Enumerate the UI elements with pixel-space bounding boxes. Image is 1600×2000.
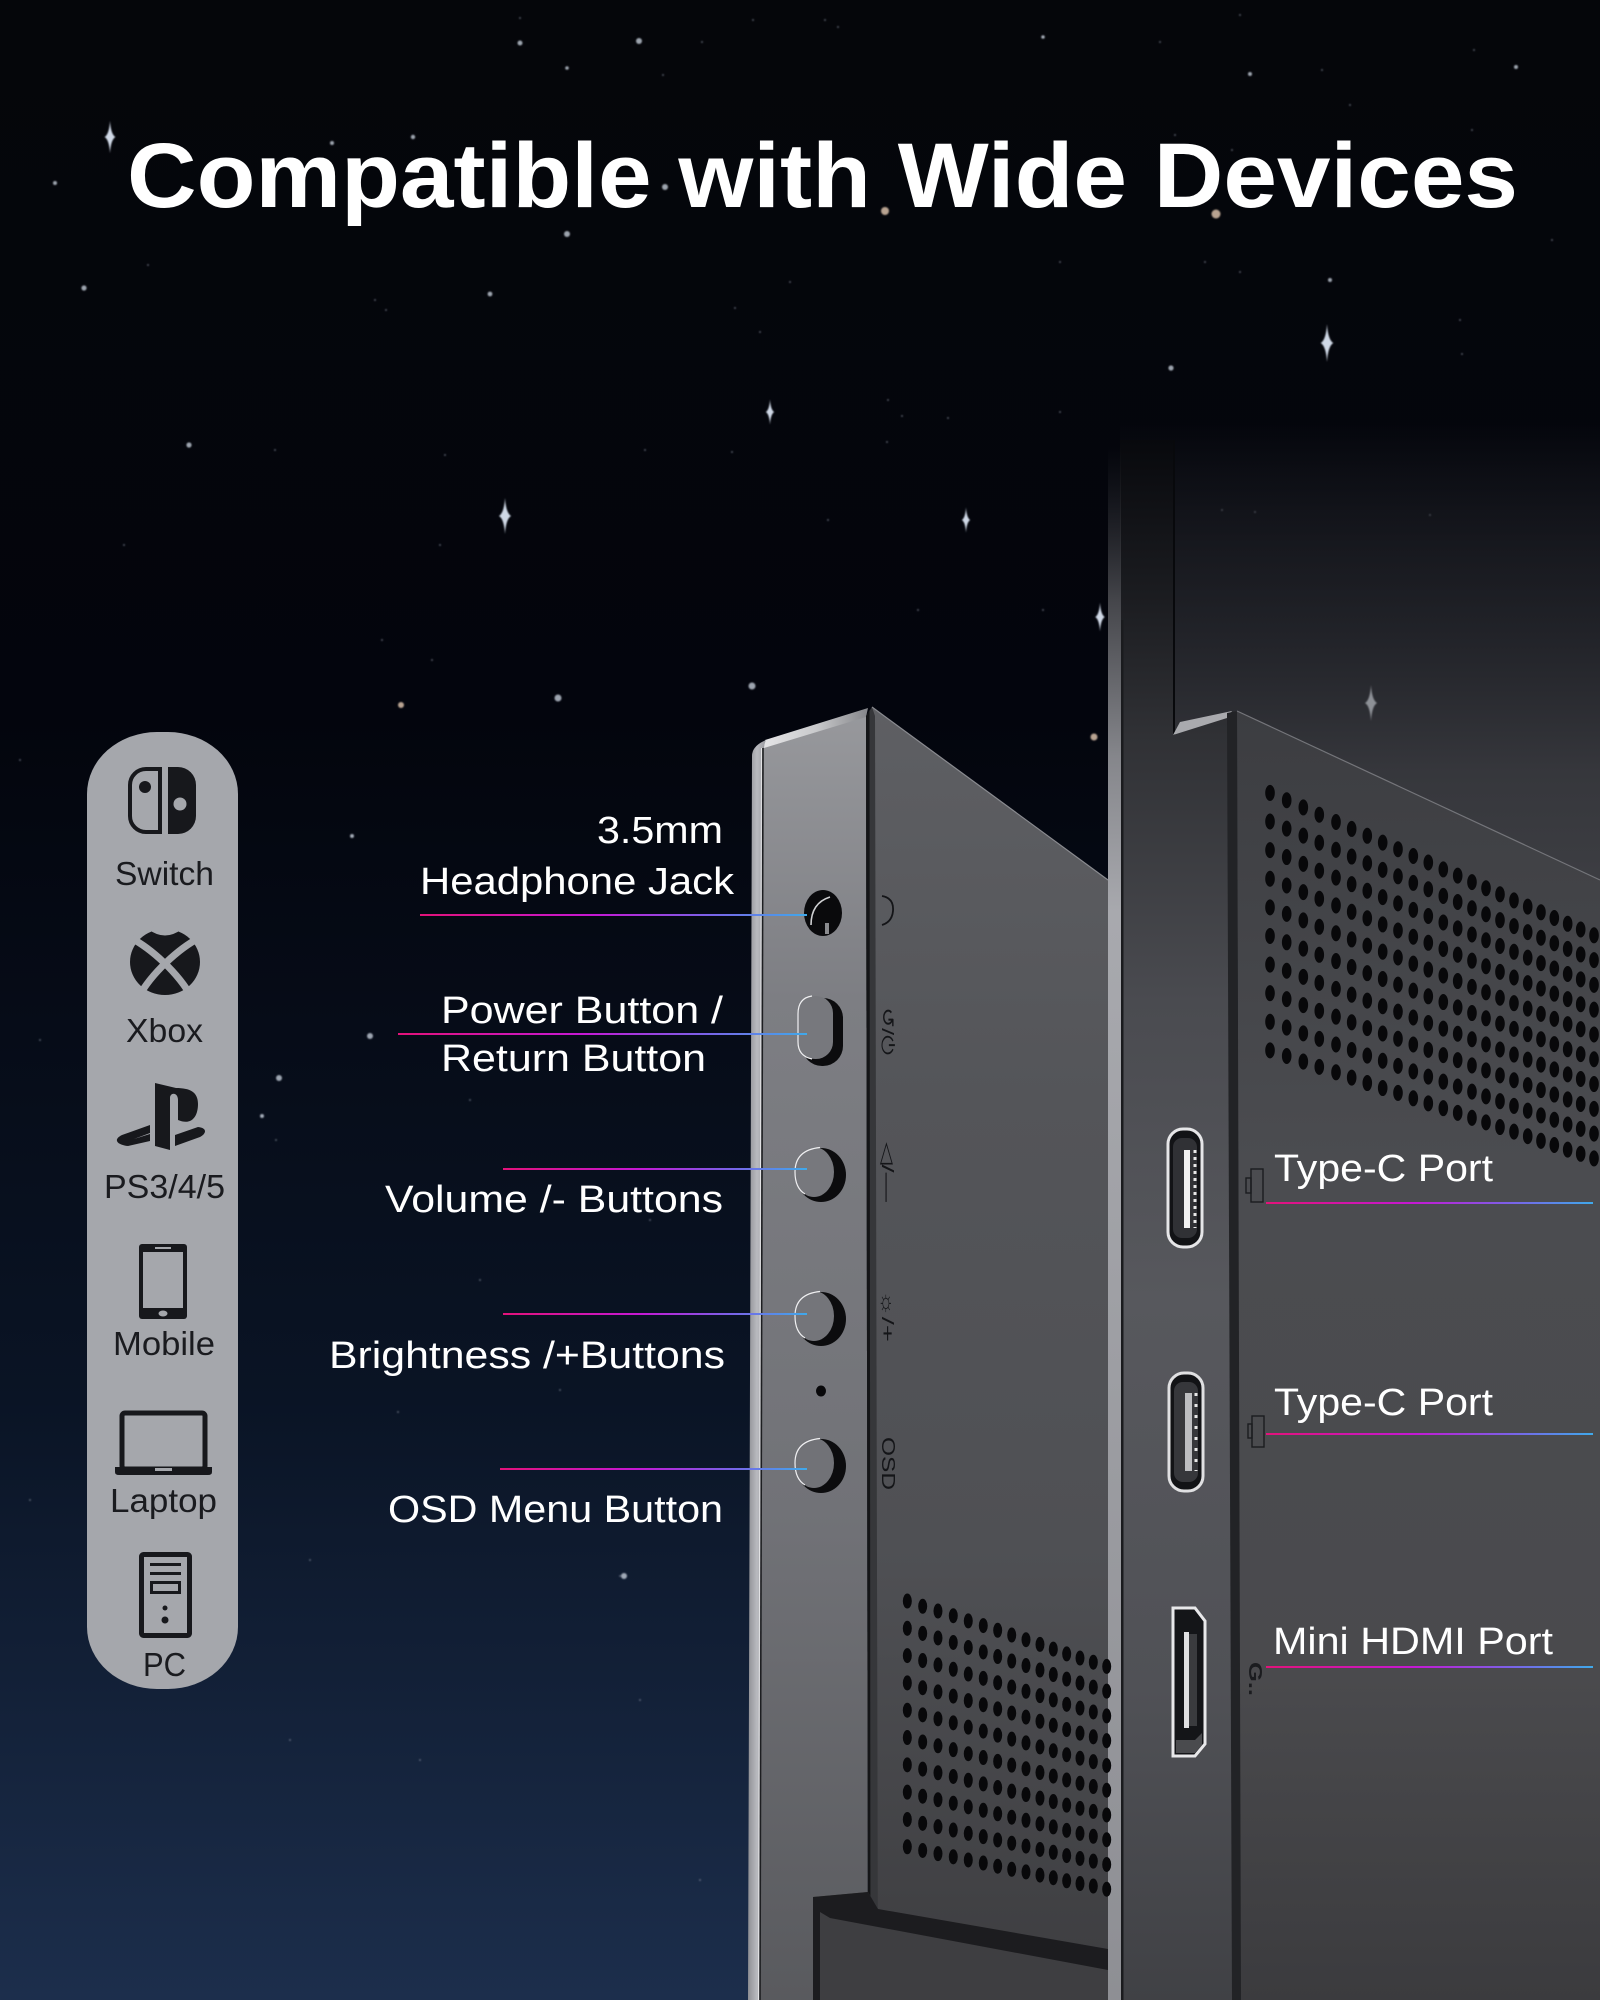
brightness button bbox=[794, 1291, 846, 1346]
callout: headphone jack: 3.5mm bbox=[597, 810, 723, 852]
callout: power / return button: Return Button bbox=[441, 1038, 706, 1080]
icon: Xbox bbox=[130, 926, 200, 998]
left monitor top bevel bbox=[764, 708, 868, 748]
icon: desktop PC bbox=[142, 1554, 190, 1636]
left monitor metal edge strip bbox=[748, 740, 766, 2000]
left monitor body bbox=[748, 707, 1108, 2000]
label: Switch: Switch bbox=[115, 855, 214, 892]
title: Compatible with Wide Devices bbox=[127, 125, 1518, 227]
label: PS3/4/5: PS3/4/5 bbox=[104, 1168, 225, 1205]
label: Xbox: Xbox bbox=[126, 1012, 204, 1049]
right monitor metal edge strip bbox=[1108, 446, 1121, 2000]
headphone jack bbox=[804, 890, 842, 936]
left vent holes bbox=[907, 1601, 1107, 1890]
right monitor corner bevel bbox=[1173, 711, 1232, 735]
right monitor back panel bbox=[1237, 711, 1600, 2000]
port mark: Type-C lower bbox=[1248, 1416, 1264, 1447]
callout: volume buttons: Volume /- Buttons bbox=[385, 1179, 723, 1221]
callout: OSD menu button: OSD Menu Button bbox=[388, 1489, 723, 1531]
callout: power / return button bbox=[398, 990, 807, 1080]
right monitor body bbox=[1108, 440, 1600, 2000]
silk mark: power / return: ↺/⏻ bbox=[878, 1007, 897, 1056]
port mark: HDMI: G.. bbox=[1245, 1662, 1265, 1696]
port: Mini HDMI bbox=[1173, 1608, 1205, 1756]
icon: PlayStation bbox=[117, 1083, 205, 1150]
callout: Type-C port lower: Type-C Port bbox=[1274, 1382, 1493, 1424]
device compatibility pill bbox=[87, 732, 238, 1689]
volume button bbox=[794, 1147, 846, 1202]
left monitor stand recess bbox=[813, 1892, 1108, 2000]
icon: Nintendo Switch bbox=[130, 767, 196, 834]
left monitor back panel bbox=[870, 707, 1108, 2000]
icon: laptop bbox=[115, 1413, 212, 1475]
port mark: Type-C upper bbox=[1246, 1169, 1263, 1202]
silk mark: OSD: OSD bbox=[878, 1437, 898, 1490]
callout: headphone jack bbox=[420, 810, 807, 916]
callout: brightness buttons: Brightness /+Buttons bbox=[329, 1335, 725, 1377]
callout: headphone jack: Headphone Jack bbox=[420, 861, 735, 903]
callout: power / return button: Power Button / bbox=[441, 990, 723, 1032]
silk mark: headphone bbox=[882, 896, 893, 925]
right vent holes bbox=[1270, 793, 1594, 1159]
right monitor side face bbox=[1120, 440, 1235, 2000]
right monitor: back panel above the vents bbox=[1120, 420, 1600, 890]
callout: Type-C port upper: Type-C Port bbox=[1274, 1148, 1493, 1190]
power button bbox=[798, 996, 843, 1066]
label: Laptop: Laptop bbox=[110, 1482, 217, 1519]
label: PC: PC bbox=[143, 1646, 186, 1683]
port: Type-C lower bbox=[1169, 1373, 1203, 1491]
port: Type-C upper bbox=[1168, 1129, 1202, 1247]
icon: mobile phone bbox=[139, 1244, 187, 1319]
callout: Mini HDMI port: Mini HDMI Port bbox=[1273, 1621, 1553, 1663]
indicator hole bbox=[816, 1386, 826, 1396]
OSD button bbox=[794, 1438, 846, 1493]
silk mark: brightness: ☼/+ bbox=[878, 1290, 897, 1342]
silk mark: volume: ◁/— bbox=[878, 1142, 897, 1202]
left monitor side face bbox=[760, 716, 868, 2000]
label: Mobile: Mobile bbox=[113, 1325, 215, 1362]
